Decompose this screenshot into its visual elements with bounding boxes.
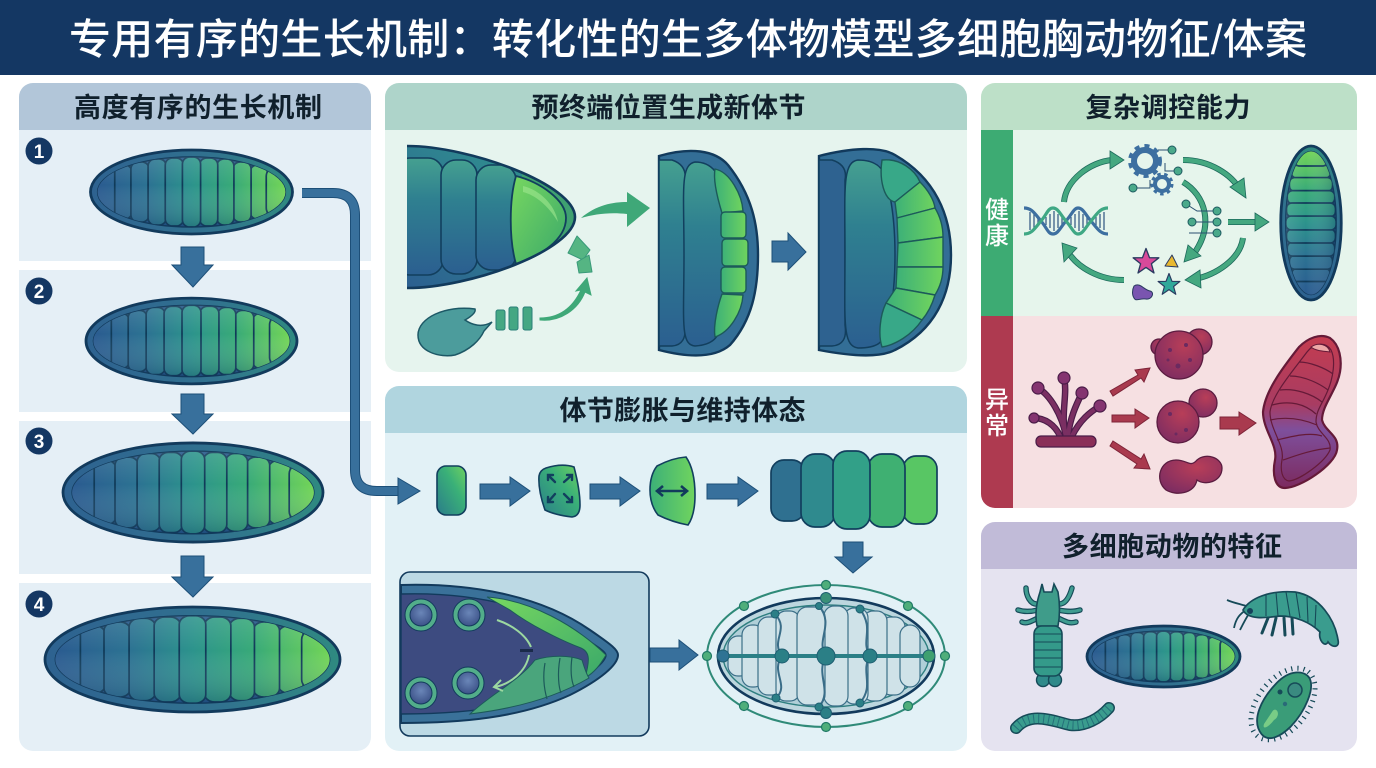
inset: tail cutaway [400,572,649,736]
badge 4: 4 [34,595,45,616]
arrow [480,477,530,506]
deformed body [1263,336,1341,488]
arrow: to expanded segments [772,233,806,270]
wider segment with double arrow [650,457,695,525]
expanding segment with arrows [539,465,580,517]
panel: pre-terminal segment generation [385,83,967,372]
icon: DNA [1024,208,1108,234]
panel: multicellular animal features [981,522,1357,752]
receptors network [1182,200,1221,237]
small cells [496,307,532,330]
badge 2: 2 [34,282,44,303]
central body [1087,626,1240,687]
young segment [437,466,466,515]
badge 1 [26,138,52,164]
sidebar: healthy: 健 [985,197,1009,224]
arthropod top view [1018,584,1080,686]
arrow: growth to new segments [581,192,650,227]
step 1 worm [90,150,292,234]
illustration: tail with growth zone [407,144,576,290]
panel: segment expansion and body maintenance [385,386,967,751]
illustration: half body with five new segments [659,151,758,355]
title banner [0,0,1376,75]
heading: expansion: 体节膨胀与维持体态 [560,396,806,426]
step 2 worm [86,298,297,384]
healthy vertical body [1281,146,1341,300]
panel: ordered growth mechanism [19,83,371,751]
arrow: step 1 to 2 [172,247,213,287]
sidebar: abnormal [981,316,1013,508]
cross section with control network [702,580,950,732]
arrowheads [1062,151,1269,288]
illustration: half body with fan of segments [819,149,951,355]
arrow: step 2 to 3 [172,394,213,434]
icon: gears [1129,146,1182,194]
polyp [1029,372,1106,447]
step 3 worm [63,443,323,542]
sidebar: healthy [981,130,1013,316]
shrimp [1227,592,1338,646]
step 4 worm [45,607,340,712]
abnormal cell: lower [1160,456,1222,493]
heading: features: 多细胞动物的特征 [1062,532,1282,562]
sidebar: healthy: 康 [985,223,1009,250]
heading: regulation: 复杂调控能力 [1086,93,1250,123]
regulation cycle arrows [1064,160,1256,280]
arrow [590,477,640,506]
arrow: step 3 to 4 [172,556,213,597]
abnormal cell: top [1151,329,1212,379]
ciliate microorganism [1238,656,1328,752]
segmented worm [1016,708,1109,728]
sidebar: abnormal: 异 [985,387,1009,414]
arrow: to cross section [650,640,698,670]
arrow: stem cell to buds [540,278,591,320]
badge 4 [26,590,52,618]
sidebar: abnormal: 常 [985,413,1009,440]
title banner: 专用有序的生长机制：转化性的生多体物模型多细胞胸动物征/体案 [69,16,1307,63]
arrow: down to cross section [835,542,872,573]
panel: complex regulation [981,83,1357,508]
segment stack [771,451,937,529]
heading: new segments: 预终端位置生成新体节 [532,92,806,123]
badge 2 [26,278,52,304]
badge 3: 3 [34,432,44,453]
badge 1: 1 [34,142,45,163]
signal molecules [1132,248,1180,300]
abnormal cell: middle [1157,389,1217,443]
budding pieces [568,236,592,273]
red arrows [1110,368,1150,396]
heading: ordered growth: 高度有序的生长机制 [74,93,322,123]
arrow [707,477,758,506]
stem cell blob [418,308,492,356]
arrow: to deformed body [1220,412,1256,435]
badge 3 [26,428,52,454]
connector arrow: step 1 to expansion [302,193,420,504]
